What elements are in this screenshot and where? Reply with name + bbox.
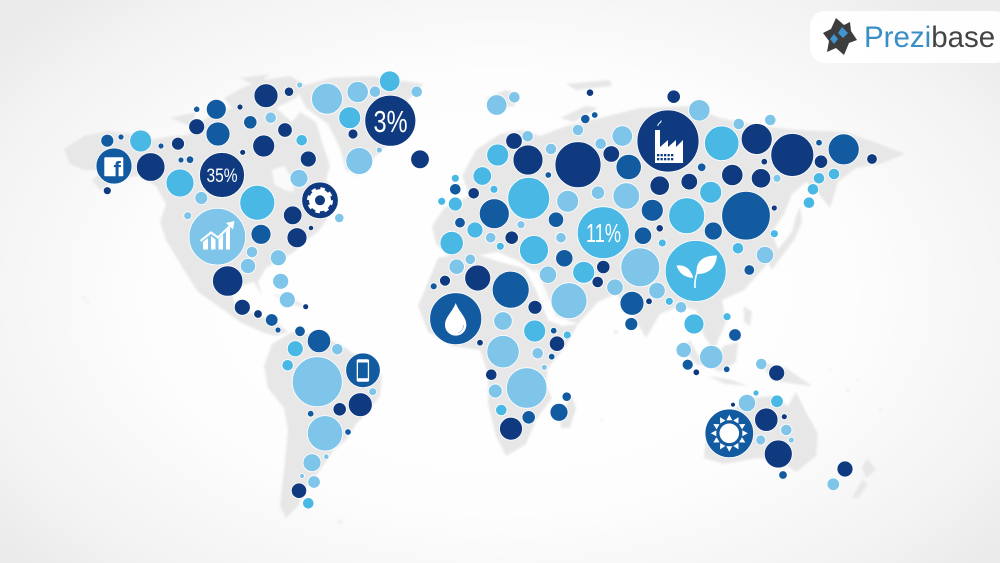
dots: Asia — [665, 100, 877, 381]
badge: sun icon — [705, 409, 754, 458]
continent: South America — [264, 332, 382, 518]
island: Ellesmere — [170, 74, 270, 126]
badge: gear icon — [302, 182, 338, 219]
dots: South America — [275, 326, 377, 509]
continent: Australia — [704, 392, 818, 472]
badge: Facebook icon — [96, 148, 132, 184]
logo: Prezibase — [810, 11, 1000, 63]
badge: Facebook icon: f — [114, 157, 122, 182]
island: Caribbean — [272, 294, 308, 308]
island: Borneo — [708, 342, 738, 372]
island: New Zealand — [852, 458, 876, 498]
badge: 3% statistic: 3% — [374, 104, 408, 139]
badge: 3% statistic — [365, 95, 416, 146]
badge: 11% statistic: 11% — [586, 218, 621, 248]
badge: 35% statistic: 35% — [206, 166, 238, 187]
Red Sea notch — [534, 270, 552, 313]
island: Sumatra and Java — [682, 340, 748, 386]
badge: smartphone icon — [346, 353, 380, 388]
badge: factory icon — [637, 110, 699, 172]
continent: Greenland — [296, 76, 424, 176]
continent: Eurasia — [432, 106, 905, 350]
dots: Australia and New Zealand — [730, 390, 853, 491]
island: Philippines — [744, 306, 752, 326]
continent: Africa — [418, 252, 578, 456]
dots: Greenland — [312, 71, 429, 174]
logo: Prezibase: Prezibase — [864, 21, 995, 54]
island: New Guinea — [760, 362, 812, 386]
badge: 35% statistic — [200, 152, 244, 198]
dots: Africa and Middle East — [430, 248, 671, 440]
island: Madagascar — [560, 396, 576, 428]
dots: Europe and North Atlantic — [438, 89, 680, 274]
Hudson Bay notch — [272, 166, 294, 192]
badge: growth chart icon — [189, 208, 246, 265]
grey world map silhouette — [64, 74, 905, 518]
continent: North America — [64, 76, 338, 336]
badge: 11% statistic — [577, 207, 629, 259]
badge: leaf sprout icon — [665, 240, 726, 302]
dots: North America — [101, 82, 344, 326]
faint coastal specks — [82, 296, 881, 524]
badge: water drop icon — [430, 293, 482, 345]
island: Japan — [768, 206, 802, 270]
island: Iceland and arctic specks — [486, 80, 612, 122]
